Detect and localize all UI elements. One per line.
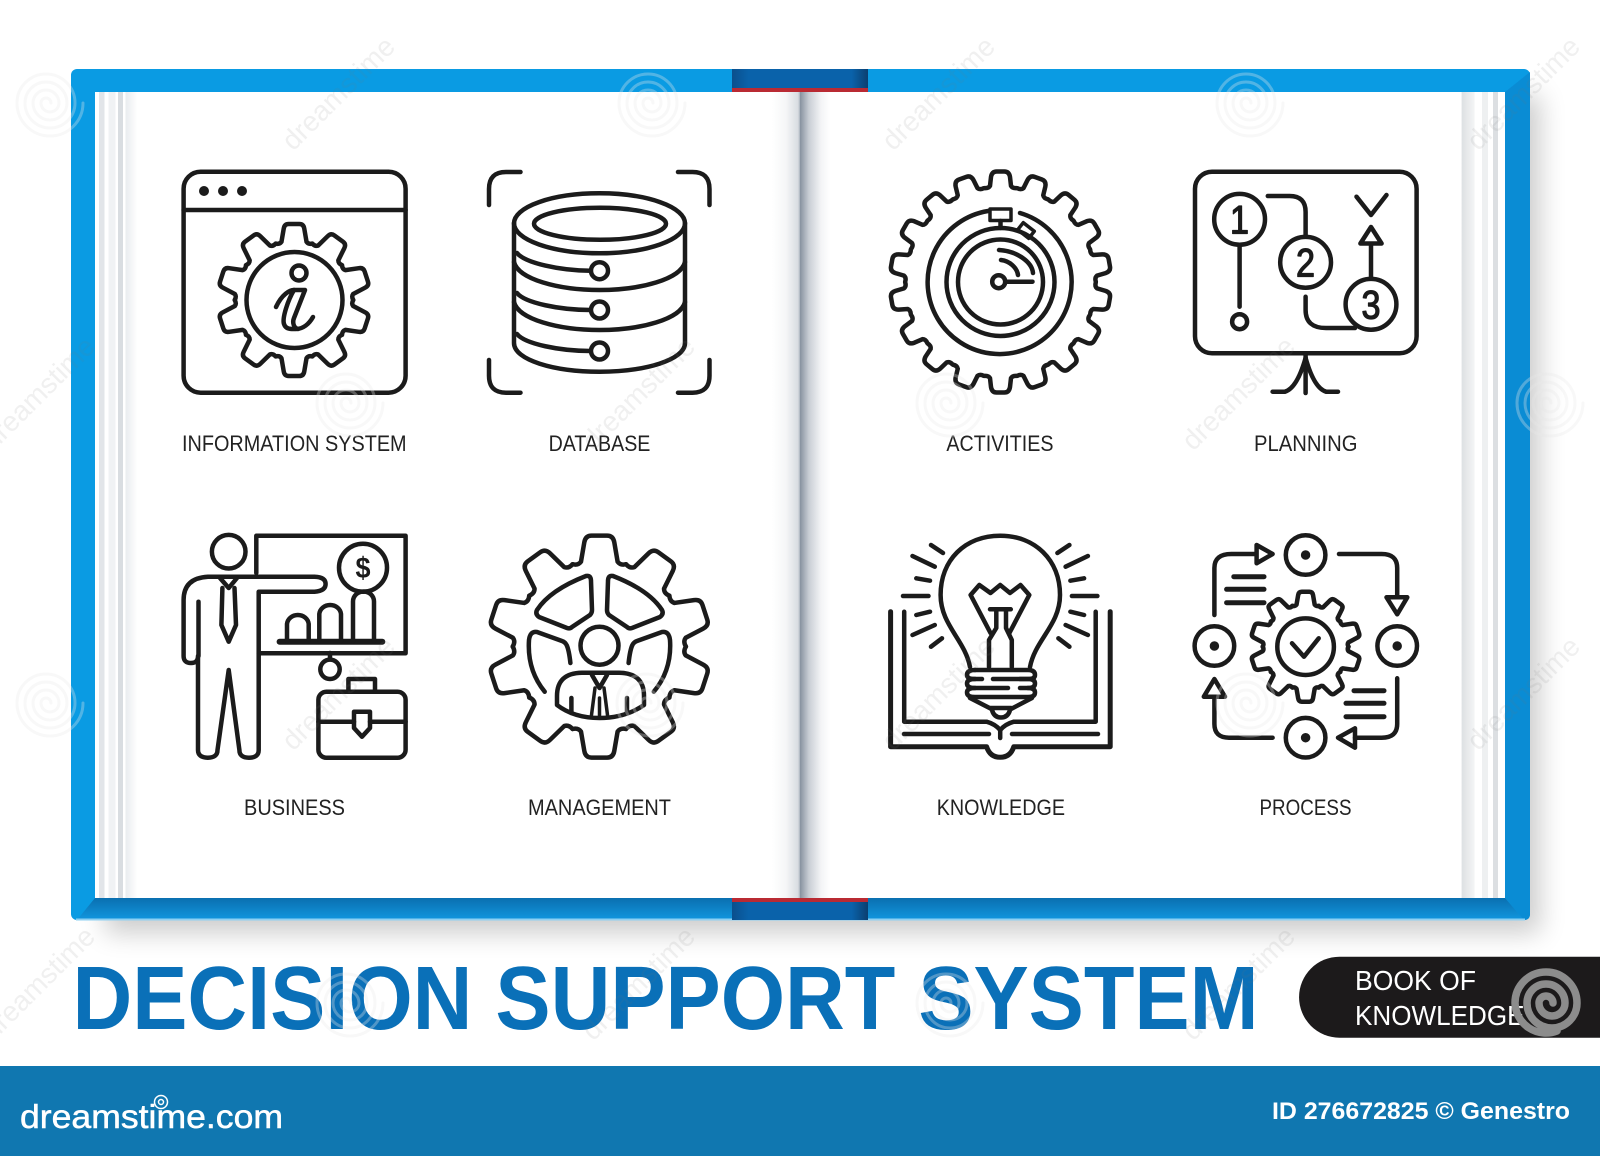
icon: business: $ [356, 552, 371, 585]
icon: activities [889, 172, 1112, 392]
watermark overlay: dreamstime [276, 31, 401, 156]
left page [95, 92, 800, 898]
icon: management [485, 536, 713, 758]
label: planning: PLANNING [1254, 431, 1358, 456]
watermark overlay: dreamstime [876, 31, 1001, 156]
icon: planning [1195, 172, 1417, 393]
icon: process [1195, 535, 1417, 758]
book cover [71, 69, 1530, 920]
book spine [732, 69, 868, 920]
icon: business [184, 535, 406, 758]
icon: knowledge [891, 536, 1110, 757]
icon: spiral watermark [1515, 972, 1577, 1033]
icon: planning: 2 [1296, 242, 1315, 286]
watermark overlay: dreamstime [576, 331, 701, 456]
icon: planning: 3 [1362, 284, 1380, 328]
label: management: MANAGEMENT [528, 795, 671, 820]
footer logo: dreamstime.com [20, 1098, 283, 1135]
watermark overlay: dreamstime [876, 631, 1001, 756]
panel: open book [71, 69, 1530, 920]
right page [800, 92, 1505, 898]
watermark overlay: dreamstime [1461, 31, 1586, 156]
icon: logo spiral [154, 1096, 168, 1108]
watermark overlay: dreamstime [576, 921, 701, 1046]
label: process: PROCESS [1260, 795, 1352, 820]
badge: book of knowledge: BOOK OF [1355, 965, 1476, 996]
icon: planning: 1 [1230, 198, 1249, 242]
footer bar [0, 1066, 1600, 1156]
label: information system: INFORMATION SYSTEM [182, 431, 407, 456]
watermark overlay: dreamstime [1176, 331, 1301, 456]
badge: book of knowledge: KNOWLEDGE [1355, 1000, 1524, 1031]
watermark overlay: dreamstime [1176, 921, 1301, 1046]
icon: information system [184, 172, 406, 393]
label: knowledge: KNOWLEDGE [937, 795, 1065, 820]
watermark overlay: dreamstime [276, 631, 401, 756]
image id and credit: ID 276672825 © Genestro [1272, 1098, 1570, 1125]
label: business: BUSINESS [244, 795, 345, 820]
book shadow [105, 95, 1540, 933]
label: database: DATABASE [549, 431, 650, 456]
icon: database [489, 172, 710, 393]
label: activities: ACTIVITIES [946, 431, 1054, 456]
badge: book of knowledge [1299, 957, 1600, 1038]
watermark overlay: dreamstime [1461, 631, 1586, 756]
title: DECISION SUPPORT SYSTEM [72, 949, 1258, 1049]
